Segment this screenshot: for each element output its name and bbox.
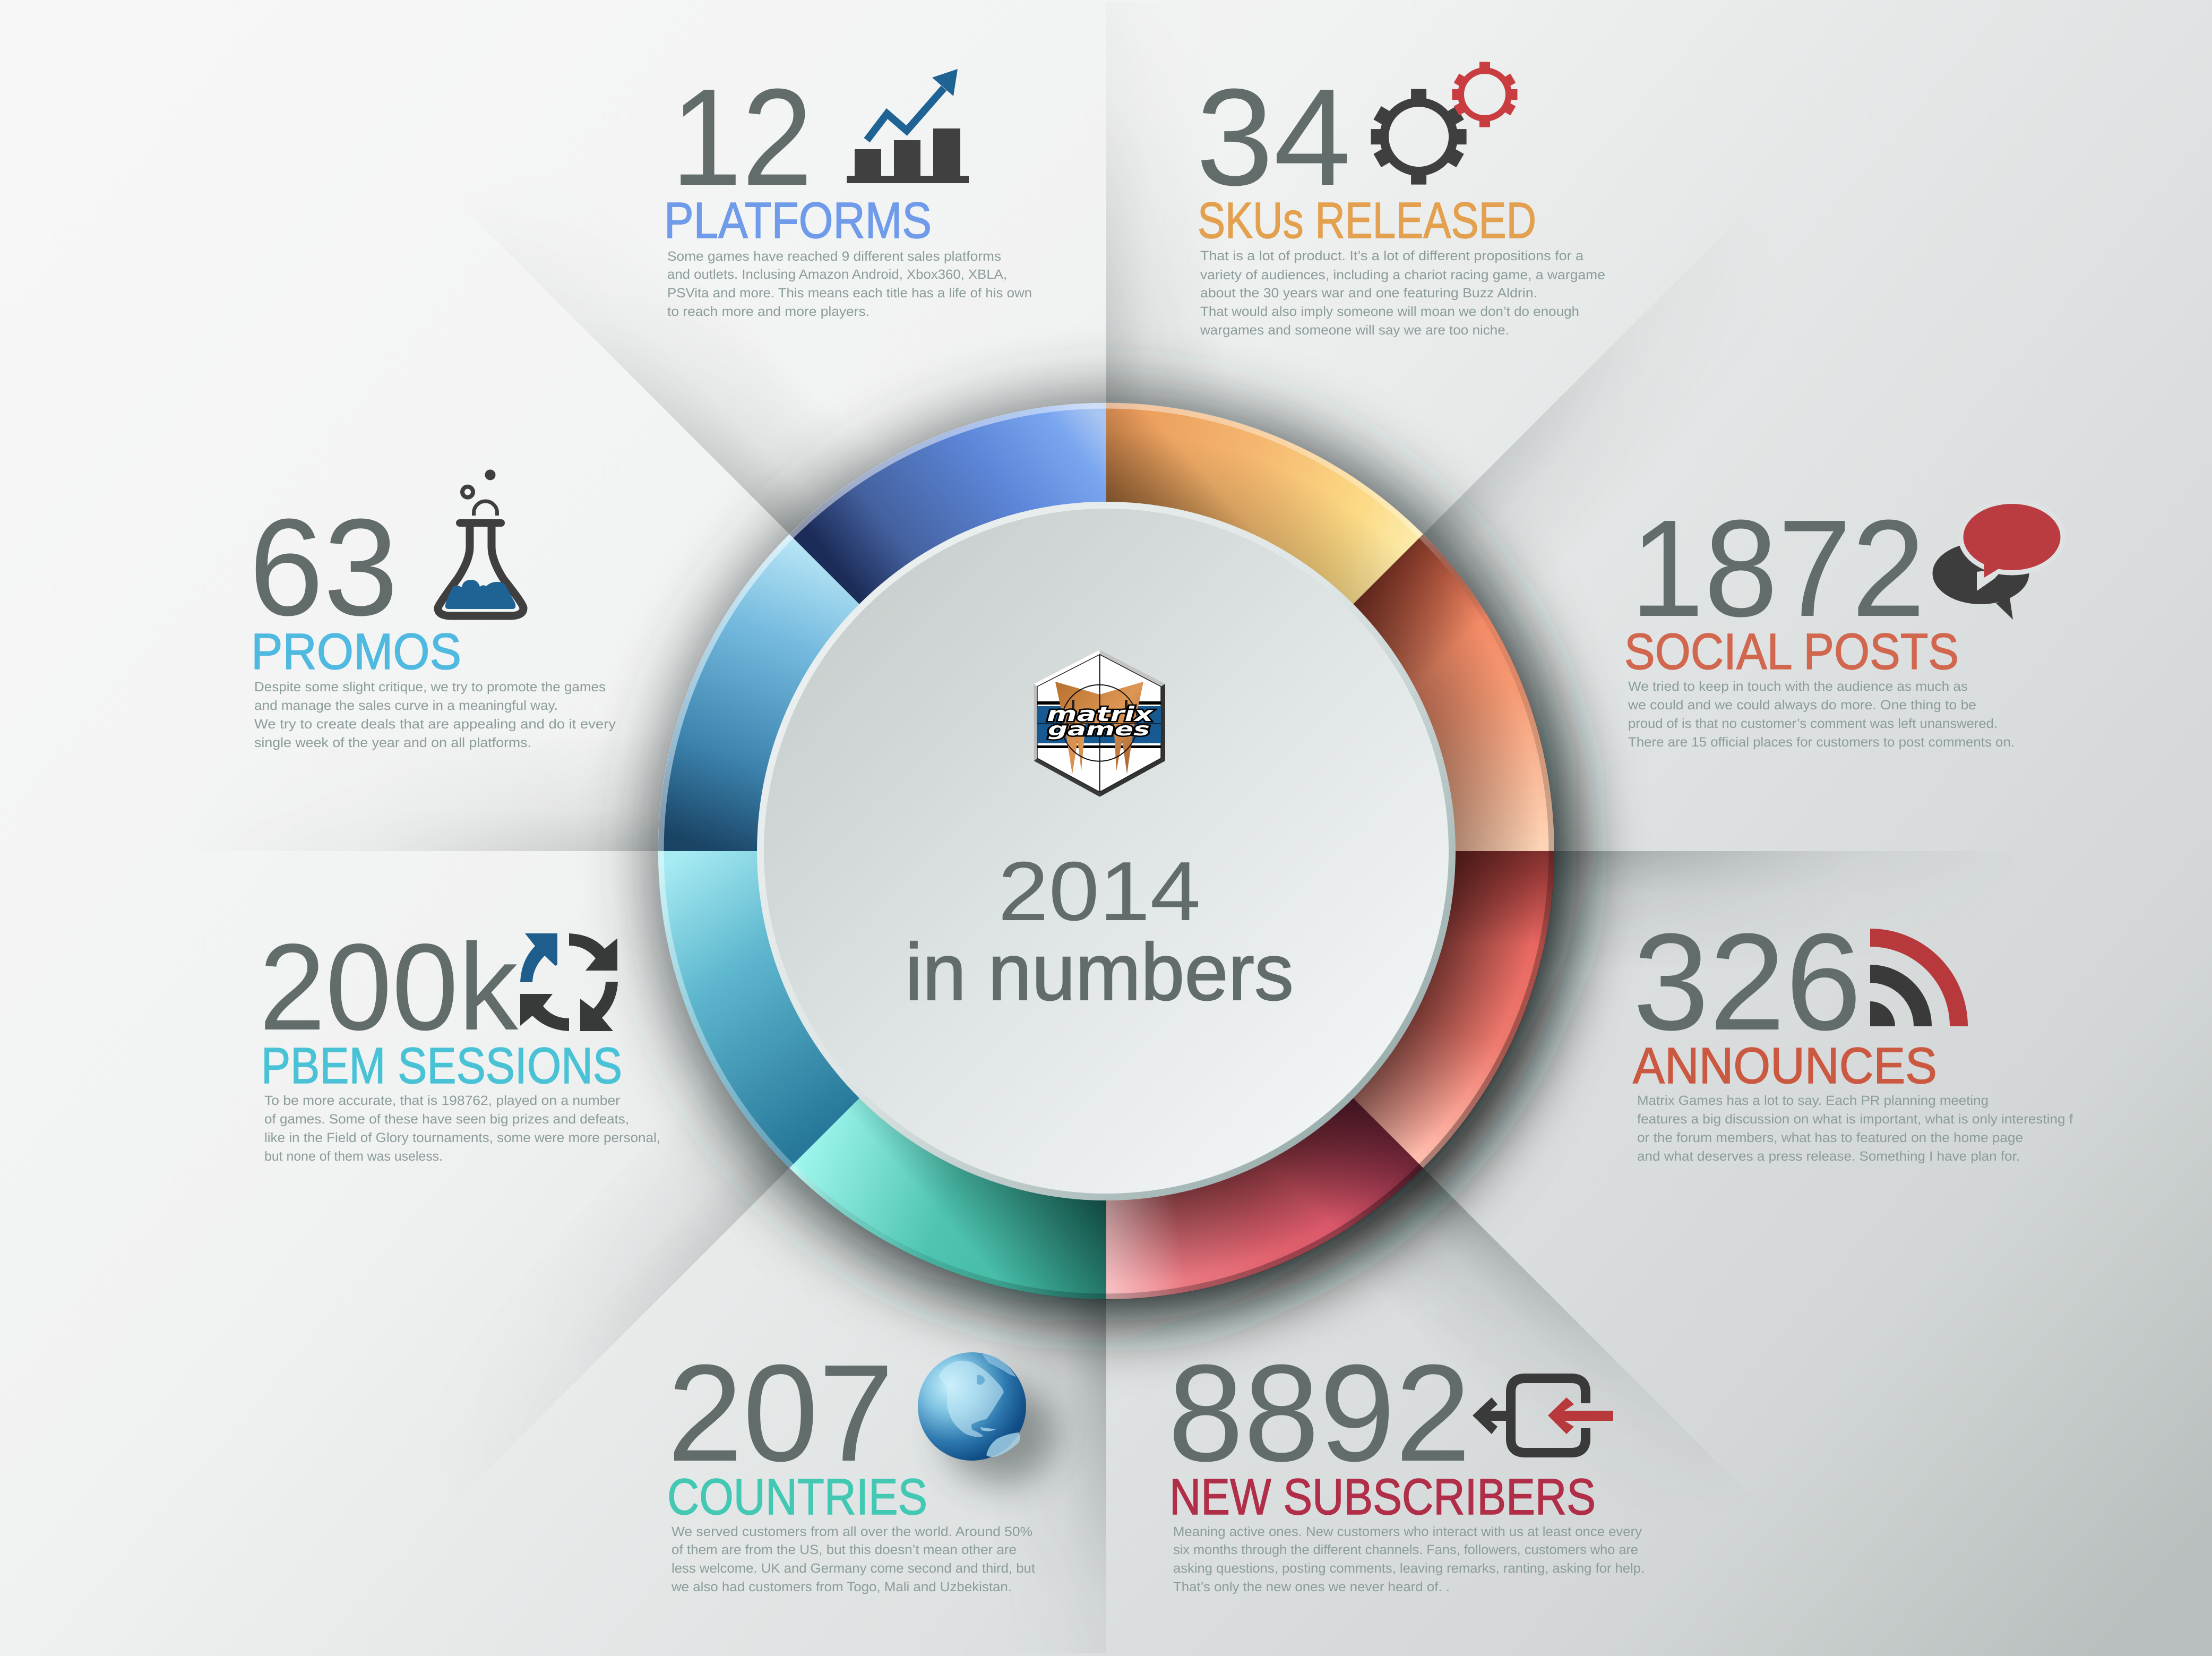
number: 326: 326: [1633, 905, 1862, 1059]
body text: of them are from the US, but this doesn’t mean other are: [672, 1542, 1017, 1557]
panel: platforms: [664, 61, 1032, 319]
ring segment: promos blue: [658, 534, 860, 851]
ring segment: countries teal: [789, 1097, 1106, 1299]
body text: to reach more and more players.: [667, 304, 870, 319]
panel: countries: [667, 1336, 1056, 1594]
body text: Meaning active ones. New customers who interact with us at least once every: [1173, 1524, 1642, 1539]
ring segment: announces red: [1352, 851, 1554, 1168]
panel: announces: [1633, 905, 2073, 1164]
body text: That’s only the new ones we never heard of. .: [1173, 1580, 1450, 1594]
body text: [1628, 679, 2015, 750]
number: 63: 63: [249, 491, 398, 645]
body text: Some games have reached 9 different sales platforms: [667, 249, 1001, 264]
panel: new subscribers: [1168, 1336, 1645, 1594]
body text: That is a lot of product. It’s a lot of different propositions for a: [1200, 248, 1583, 263]
title: SKUs released: SKUs RELEASED: [1198, 192, 1536, 249]
body text: single week of the year and on all platforms.: [254, 735, 531, 750]
ring segment: subscribers crimson: [1106, 1097, 1423, 1299]
title: PBEM sessions: PBEM SESSIONS: [261, 1037, 622, 1094]
body text: [254, 680, 616, 750]
body text: [671, 1524, 1035, 1594]
title: announces: ANNOUNCES: [1633, 1037, 1937, 1094]
body text: [1173, 1524, 1645, 1594]
body text: of games. Some of these have seen big prizes and defeats,: [264, 1112, 629, 1127]
ring outer rim: [661, 406, 1552, 1297]
body text: [1200, 248, 1605, 338]
panel: SKUs released: [1196, 61, 1605, 338]
body text: and manage the sales curve in a meaningful way.: [254, 698, 558, 713]
logo: matrix games hexagon: matrix: [1047, 702, 1154, 726]
number: 1872: 1872: [1630, 492, 1925, 646]
icon: RSS signal: [1870, 929, 1968, 1026]
ring segment: PBEM cyan: [658, 851, 860, 1168]
icon: globe: [918, 1352, 1056, 1484]
body text: We tried to keep in touch with the audience as much as: [1628, 679, 1968, 694]
body text: variety of audiences, including a chariot racing game, a wargame: [1200, 268, 1605, 282]
body text: To be more accurate, that is 198762, played on a number: [264, 1093, 620, 1108]
body text: we also had customers from Togo, Mali and Uzbekistan.: [671, 1580, 1012, 1594]
colour ring: [658, 403, 1554, 1299]
body text: Matrix Games has a lot to say. Each PR planning meeting: [1637, 1093, 1989, 1108]
number: 207: 207: [667, 1336, 894, 1490]
panel: PBEM sessions: [259, 919, 660, 1164]
number: 12: 12: [671, 61, 813, 214]
body text: like in the Field of Glory tournaments, some were more personal,: [264, 1130, 660, 1145]
ring segment: platforms navy: [789, 403, 1106, 605]
body text: [264, 1093, 660, 1164]
number: 34: 34: [1196, 61, 1351, 214]
body text: and what deserves a press release. Something I have plan for.: [1637, 1149, 2020, 1164]
icon: login arrows: [1473, 1378, 1613, 1453]
body text: features a big discussion on what is important, what is only interesting f: [1637, 1112, 2073, 1127]
number: 200k: 200k: [259, 919, 519, 1056]
ring drop shadow: [651, 396, 1577, 1322]
body text: We served customers from all over the world. Around 50%: [672, 1524, 1032, 1539]
title: new subscribers: NEW SUBSCRIBERS: [1169, 1469, 1596, 1525]
body text: wargames and someone will say we are too niche.: [1200, 323, 1509, 338]
logo: matrix games hexagon: [1034, 650, 1165, 797]
centre heading: 2014: [998, 845, 1201, 938]
body text: or the forum members, what has to featured on the home page: [1637, 1130, 2023, 1145]
body text: about the 30 years war and one featuring Buzz Aldrin.: [1200, 286, 1537, 301]
body text: We try to create deals that are appealing and do it every: [254, 717, 616, 732]
body text: asking questions, posting comments, leaving remarks, ranting, asking for help.: [1173, 1561, 1645, 1576]
icon: flask: [438, 469, 523, 616]
panel: promos: [249, 469, 616, 750]
logo: matrix games hexagon: games: [1048, 719, 1150, 740]
body text: [1637, 1093, 2073, 1164]
body text: less welcome. UK and Germany come second and third, but: [672, 1561, 1035, 1576]
panel: social posts: [1624, 492, 2065, 750]
title: social posts: SOCIAL POSTS: [1624, 623, 1959, 680]
icon: cycle arrows: [520, 933, 618, 1031]
body text: Despite some slight critique, we try to promote the games: [254, 680, 606, 694]
body text: we could and we could always do more. One thing to be: [1628, 698, 1976, 713]
ring segment: social posts coral: [1352, 534, 1554, 851]
body text: There are 15 official places for customers to post comments on.: [1628, 735, 2015, 750]
body text: That would also imply someone will moan we don’t do enough: [1200, 304, 1579, 319]
body text: six months through the different channels. Fans, followers, customers who are: [1173, 1542, 1638, 1557]
icon: speech bubbles: [1932, 499, 2065, 620]
title: countries: COUNTRIES: [667, 1469, 927, 1525]
body text: [667, 249, 1032, 319]
icon: gears: [1371, 62, 1517, 185]
body text: and outlets. Inclusing Amazon Android, Xbox360, XBLA,: [667, 267, 1007, 282]
title: platforms: PLATFORMS: [664, 192, 932, 249]
sector divider shadows: [256, 68, 2061, 1653]
centre disc: [757, 502, 1456, 1200]
body text: but none of them was useless.: [264, 1149, 443, 1164]
ring segment: SKUs orange: [1106, 403, 1423, 605]
icon: bar chart with arrow: [847, 69, 969, 183]
title: promos: PROMOS: [251, 623, 461, 680]
body text: PSVita and more. This means each title has a life of his own: [667, 286, 1032, 301]
centre heading: in numbers: [905, 927, 1294, 1017]
centre heading: [905, 845, 1294, 1017]
number: 8892: 8892: [1168, 1336, 1471, 1490]
body text: proud of is that no customer’s comment was left unanswered.: [1628, 716, 1998, 731]
